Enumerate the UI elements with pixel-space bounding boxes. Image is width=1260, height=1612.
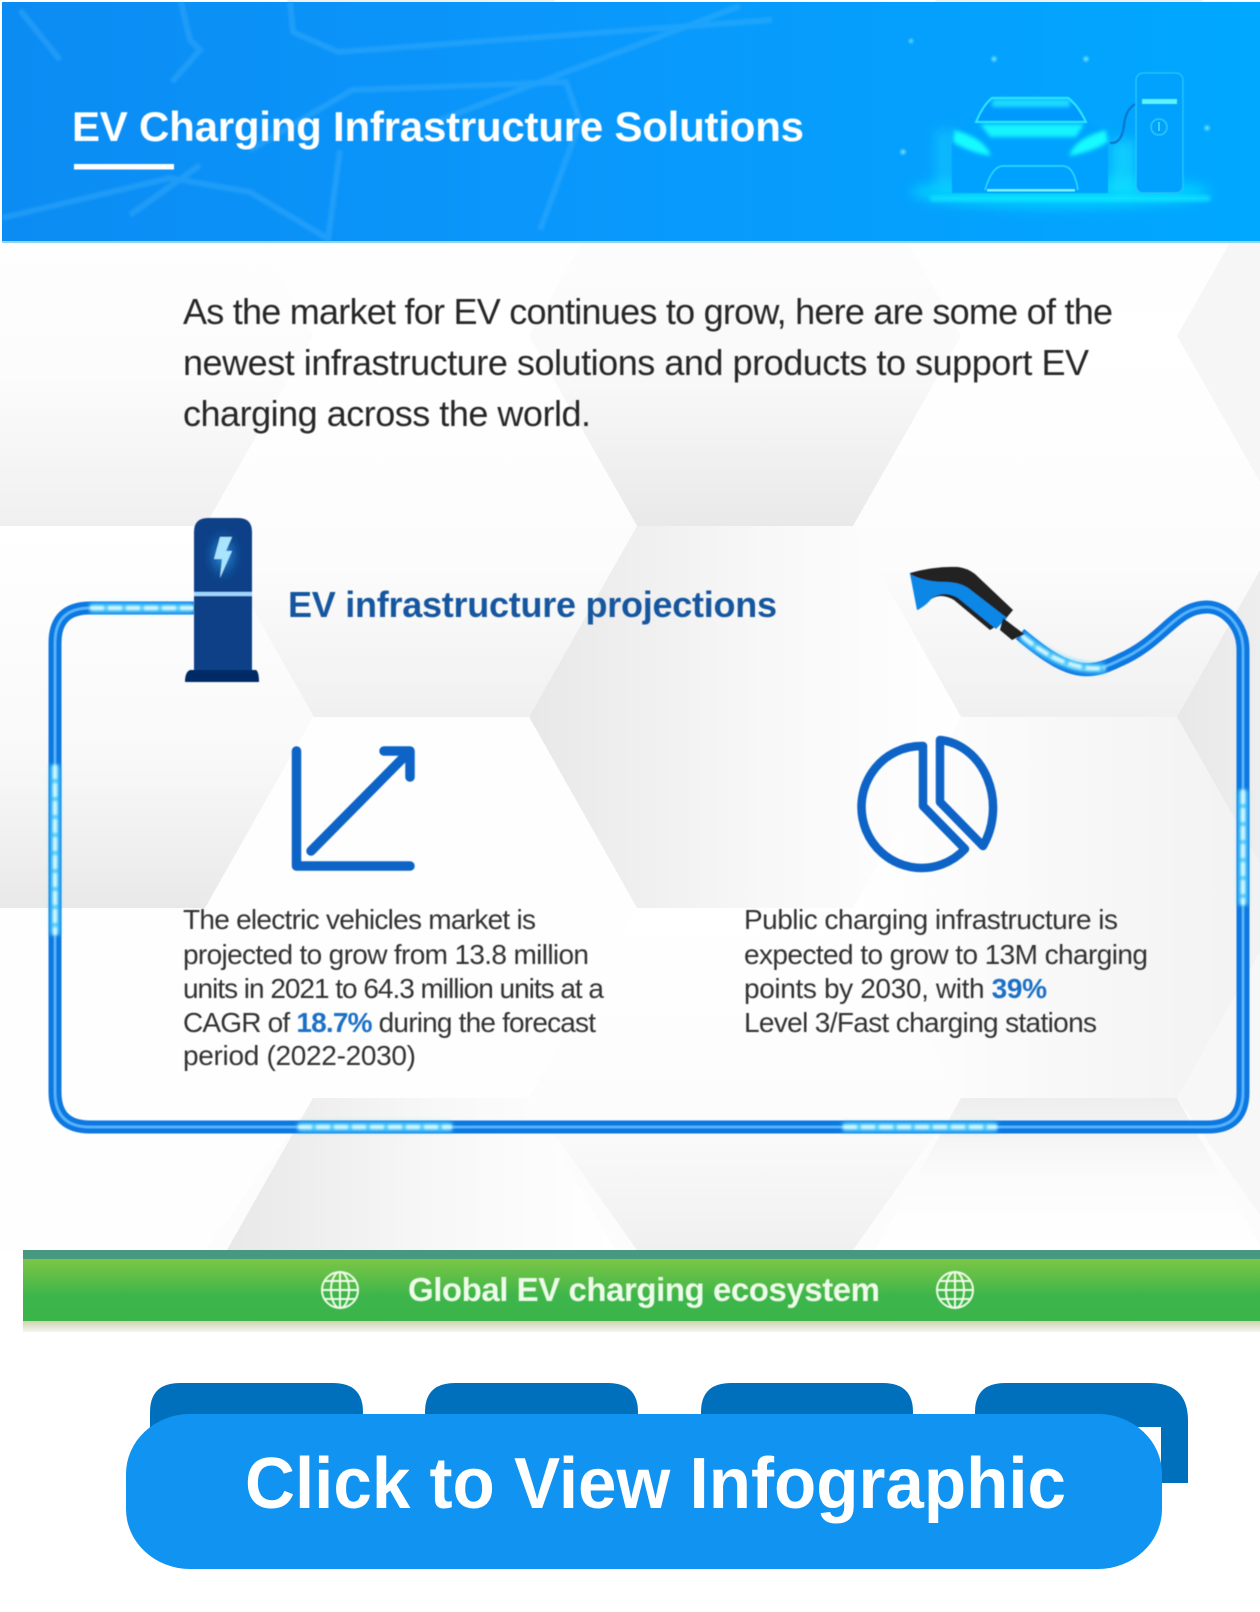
intro text: As the market for EV continues to grow, here are some of the — [183, 291, 1113, 332]
button: click to view infographic — [126, 1414, 1162, 1569]
button: click to view infographic: Click to View Infographic — [245, 1444, 1066, 1524]
text block: market projection: projected to grow from 13.8 million — [183, 939, 589, 970]
charging cable loop — [55, 607, 1243, 1127]
text block: market projection: The electric vehicles market is — [183, 904, 536, 935]
text block: market projection: units in 2021 to 64.3 million units at a — [183, 973, 604, 1004]
panel: green section band — [0, 1250, 1260, 1612]
section heading: EV infrastructure projections: EV infrastructure projections — [288, 584, 777, 625]
text block: public charging: expected to grow to 13M charging — [744, 939, 1148, 970]
panel: hexagon background — [0, 0, 1260, 1252]
intro text — [183, 291, 1113, 434]
icon: charging station — [185, 518, 259, 682]
icon: connector plug — [910, 567, 1024, 640]
title: EV Charging Infrastructure Solutions — [72, 103, 804, 150]
text block: market projection — [183, 904, 604, 1071]
text block: market projection: period (2022-2030) — [183, 1040, 416, 1071]
text block: public charging: Public charging infrastructure is — [744, 904, 1118, 935]
icon: globe right — [937, 1272, 973, 1308]
icon: globe left — [322, 1272, 358, 1308]
icon: growth arrow chart — [296, 751, 410, 866]
text block: public charging — [744, 904, 1148, 1038]
icon: pie chart — [862, 740, 993, 868]
intro text: charging across the world. — [183, 393, 591, 434]
text block: public charging: Level 3/Fast charging stations — [744, 1007, 1097, 1038]
icon: glowing car and charging station — [900, 39, 1210, 208]
intro text: newest infrastructure solutions and products to support EV — [183, 342, 1089, 383]
text block: public charging: points by 2030, with 39% — [744, 973, 1047, 1004]
text block: market projection: CAGR of 18.7% during the forecast — [183, 1007, 596, 1038]
band heading: Global EV charging ecosystem — [408, 1271, 880, 1308]
blue tabs behind button — [150, 1383, 1188, 1483]
title underline — [74, 164, 174, 170]
panel: header banner — [2, 2, 1260, 243]
